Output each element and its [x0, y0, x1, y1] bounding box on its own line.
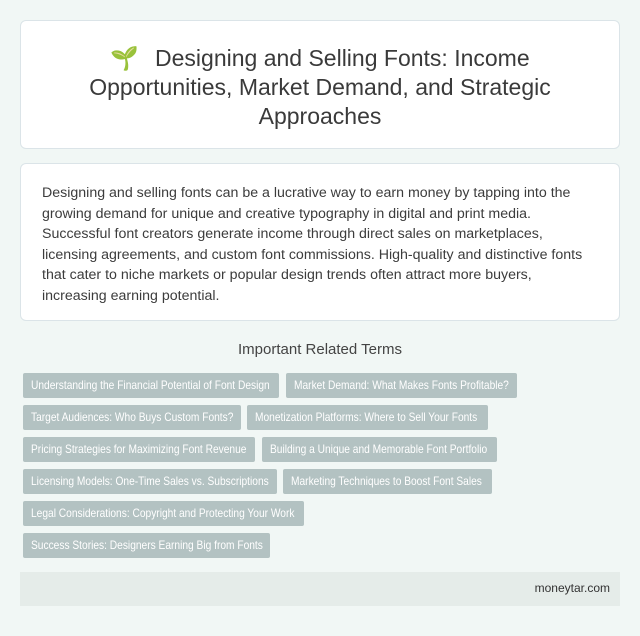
tag: Building a Unique and Memorable Font Portfolio	[270, 442, 487, 456]
tag	[286, 373, 517, 398]
tag: Marketing Techniques to Boost Font Sales	[291, 474, 482, 488]
tag	[23, 533, 270, 558]
tag	[23, 373, 279, 398]
footer brand: moneytar.com	[535, 581, 610, 595]
tag	[23, 501, 304, 526]
tag	[23, 405, 241, 430]
tag: Target Audiences: Who Buys Custom Fonts?	[31, 410, 233, 424]
tag	[23, 437, 255, 462]
tag: Licensing Models: One-Time Sales vs. Subscriptions	[31, 474, 269, 488]
tag: Understanding the Financial Potential of Font Design	[31, 378, 270, 392]
heading: related terms: Important Related Terms	[238, 341, 402, 358]
tag	[283, 469, 492, 494]
tag	[262, 437, 497, 462]
tag: Market Demand: What Makes Fonts Profitable?	[294, 378, 509, 392]
tag: Pricing Strategies for Maximizing Font Revenue	[31, 442, 246, 456]
footer	[20, 572, 620, 606]
title: 🌱 Designing and Selling Fonts: Income Opportunities, Market Demand, and Strategic Approaches	[89, 45, 551, 129]
description panel	[20, 163, 620, 321]
tag: Monetization Platforms: Where to Sell Your Fonts	[255, 410, 477, 424]
tag	[23, 469, 277, 494]
description text: Designing and selling fonts can be a lucrative way to earn money by tapping into the growing demand for unique and creative typography in digital and print media. Successful font creators generate income through direct sales on marketplaces, licensing agreements, and custom font commissions. High-quality and distinctive fonts that cater to niche markets or popular design trends often attract more buyers, increasing earning potential.	[42, 185, 582, 304]
tag	[247, 405, 488, 430]
title panel	[20, 20, 620, 149]
tag: Legal Considerations: Copyright and Protecting Your Work	[31, 506, 294, 520]
tag: Success Stories: Designers Earning Big from Fonts	[31, 538, 263, 552]
